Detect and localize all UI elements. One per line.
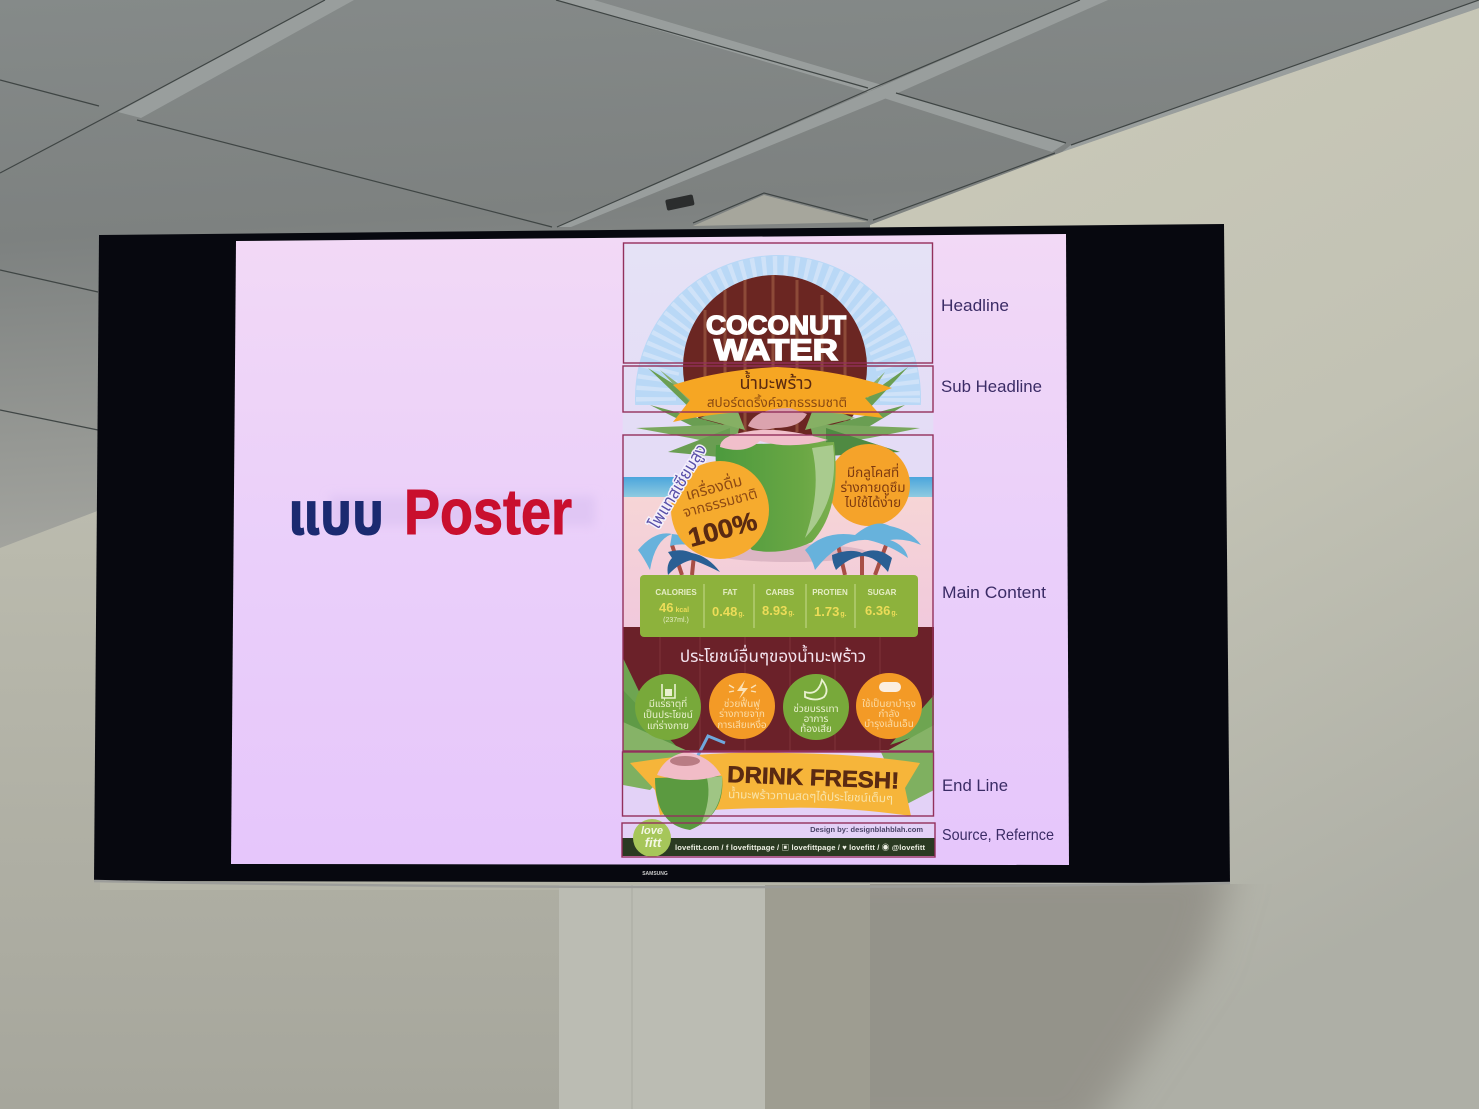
- television: [94, 224, 1230, 887]
- label: sub headline: Sub Headline: [941, 377, 1042, 396]
- sunburst: [635, 255, 921, 405]
- poster background: [622, 244, 934, 838]
- benefit circle 4: กำลัง: [878, 708, 900, 720]
- lovefitt logo: [633, 819, 671, 857]
- annotation boxes: [622, 243, 935, 857]
- nutrition panel: 6.36g.: [865, 603, 898, 618]
- benefit circle 2: [709, 673, 775, 739]
- wall: lower left: [0, 510, 560, 1109]
- sea: [623, 477, 933, 497]
- title: [288, 476, 595, 548]
- footer band: [622, 838, 935, 856]
- headline text: COCONUT: [706, 310, 846, 340]
- curved side label: โพแทสเซียมสูง: [645, 441, 712, 533]
- credit line: Design by: designblahblah.com: [810, 825, 923, 834]
- nutrition panel: 8.93g.: [762, 603, 795, 618]
- left orange badge: เครื่องดื่ม: [683, 470, 744, 504]
- left orange badge: [671, 461, 769, 559]
- benefit circle 2: ร่างกายจาก: [719, 707, 765, 720]
- footer band: lovefitt.com / f lovefittpage / ▣ lovefittpage / ♥ lovefitt / ◉ @lovefitt: [675, 843, 925, 852]
- title: แบบ: [288, 480, 384, 547]
- nutrition panel: PROTIEN: [812, 588, 848, 597]
- poster: [622, 244, 935, 857]
- pillar: [559, 885, 765, 1109]
- benefit circle 2: ช่วยฟื้นฟู: [724, 696, 760, 710]
- box: headline: [624, 243, 932, 363]
- right palm trees: [805, 523, 921, 575]
- benefit circle 4: ใช้เป็นยาบำรุง: [862, 698, 916, 710]
- benefit circle 4: บำรุงเส้นเอ็น: [864, 717, 914, 730]
- label: main content: Main Content: [942, 583, 1046, 602]
- sub headline ribbon: สปอร์ตดริ้งค์จากธรรมชาติ: [707, 394, 847, 410]
- box: sub headline: [623, 366, 933, 412]
- benefit circle 3: [783, 674, 849, 740]
- television: SAMSUNG: [642, 871, 668, 877]
- left orange badge: 100%: [685, 506, 760, 553]
- headline text: WATER: [714, 334, 838, 367]
- end ribbon: น้ำมะพร้าวทานสดๆได้ประโยชน์เต็มๆ: [728, 786, 893, 805]
- box: end line: [622, 752, 934, 816]
- label: end line: End Line: [942, 776, 1008, 795]
- benefit circle 3: ท้องเสีย: [800, 723, 832, 735]
- left palm trees: [638, 533, 720, 575]
- right orange badge: ร่างกายดูซึม: [840, 479, 906, 496]
- nutrition panel: FAT: [723, 588, 737, 597]
- right orange badge: มีกลูโคสที่: [847, 463, 899, 481]
- wall: pillar side face: [765, 885, 870, 1109]
- screen: [231, 234, 1069, 865]
- nutrition panel: CALORIES: [655, 588, 697, 597]
- lovefitt logo: love: [641, 825, 663, 837]
- palm leaves behind coconut: [636, 367, 920, 458]
- wall: right side: [870, 8, 1479, 1109]
- benefit circle 1: มีแร่ธาตุที่: [649, 696, 687, 710]
- nutrition panel: SUGAR: [868, 588, 897, 597]
- lovefitt logo: fitt: [645, 835, 662, 850]
- benefit circle 4: [856, 673, 922, 739]
- bottom palm leaves: [623, 658, 934, 805]
- sub headline ribbon: [673, 367, 892, 422]
- nutrition panel: 1.73g.: [814, 604, 847, 619]
- box: source: [622, 823, 935, 857]
- left orange badge: จากธรรมชาติ: [681, 486, 759, 521]
- benefit circle 1: [635, 674, 701, 740]
- annotation labels: [941, 296, 1054, 844]
- sand: [623, 497, 933, 627]
- benefit circle 2: การเสียเหงื่อ: [717, 717, 767, 731]
- ceiling: [0, 0, 1479, 560]
- coconut shell: [683, 275, 867, 434]
- drink coconut with straw: [655, 736, 725, 830]
- headline text: [706, 310, 846, 367]
- benefits brown band: [623, 627, 934, 752]
- sub headline ribbon: น้ำมะพร้าว: [740, 370, 812, 393]
- benefit circle 1: แก่ร่างกาย: [647, 719, 689, 732]
- nutrition panel: (237ml.): [663, 617, 689, 624]
- right orange badge: ไปใช้ได้ง่าย: [844, 494, 901, 510]
- wall: shadow beside pillar: [870, 884, 1238, 1109]
- nutrition panel: 46 kcal: [659, 600, 689, 615]
- title: Poster: [404, 476, 572, 548]
- benefit circle 3: ช่วยบรรเทา: [793, 702, 839, 715]
- right orange badge: [828, 444, 910, 526]
- label: source: Source, Refernce: [942, 827, 1054, 844]
- benefit circle 1: เป็นประโยชน์: [643, 709, 693, 721]
- end ribbon: [630, 752, 920, 816]
- green coconut: [712, 408, 868, 562]
- benefit circle 3: อาการ: [804, 714, 828, 725]
- end ribbon: DRINK FRESH!: [727, 761, 900, 794]
- label: headline: Headline: [941, 296, 1009, 315]
- box: main content: [623, 435, 933, 751]
- nutrition panel: 0.48g.: [712, 604, 745, 619]
- nutrition panel: CARBS: [766, 588, 795, 597]
- nutrition panel: [640, 575, 918, 637]
- benefits heading: ประโยชน์อื่นๆของน้ำมะพร้าว: [680, 644, 866, 666]
